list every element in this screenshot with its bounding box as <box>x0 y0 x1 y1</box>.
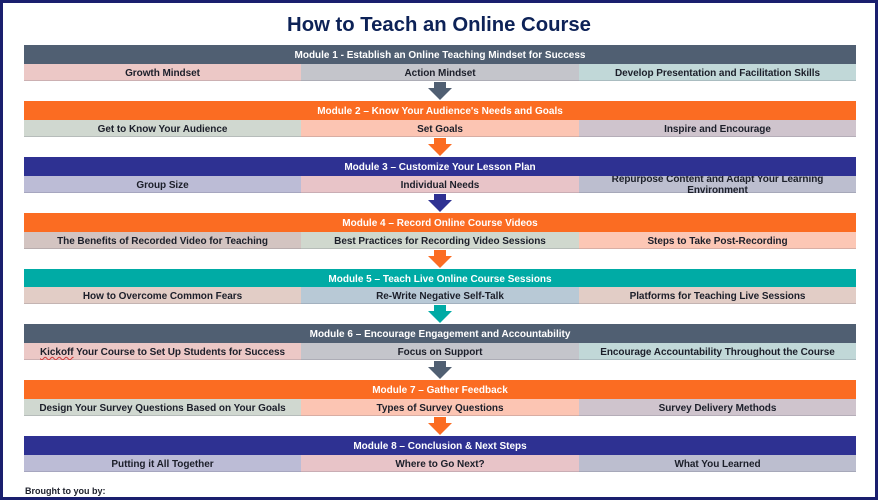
module 4 heading <box>24 213 856 232</box>
topic: negative self-talk: Re-Write Negative Self-Talk <box>376 291 504 302</box>
topic: survey delivery methods <box>579 399 856 416</box>
title: How to Teach an Online Course <box>287 14 591 36</box>
topic: presentation skills <box>579 64 856 81</box>
module 2 heading: Module 2 – Know Your Audience's Needs and Goals <box>317 106 563 117</box>
module 7 heading: Module 7 – Gather Feedback <box>372 385 508 396</box>
topic: set goals <box>301 120 579 137</box>
panel: module 7 <box>24 380 856 416</box>
topic: where to go next <box>301 455 579 472</box>
topic: overcome fears: How to Overcome Common Fears <box>83 291 242 302</box>
topic: action mindset <box>301 64 579 81</box>
topic: design survey questions: Design Your Survey Questions Based on Your Goals <box>39 403 286 414</box>
topic: survey delivery methods: Survey Delivery Methods <box>659 403 776 414</box>
module 1 heading <box>24 45 856 64</box>
topic: know your audience: Get to Know Your Audience <box>98 124 227 135</box>
panel: module 5 <box>24 269 856 304</box>
topic: set goals: Set Goals <box>417 124 463 135</box>
topic: post-recording steps: Steps to Take Post-Recording <box>647 236 788 247</box>
panel: module 4 <box>24 213 856 249</box>
topic: overcome fears <box>24 287 301 304</box>
module 6 heading: Module 6 – Encourage Engagement and Accountability <box>310 329 570 340</box>
module 5 heading: Module 5 – Teach Live Online Course Sessions <box>328 274 552 285</box>
topic: action mindset: Action Mindset <box>405 68 475 79</box>
topic: best practices <box>301 232 579 249</box>
topic: what you learned: What You Learned <box>674 459 761 470</box>
panel: module 8 <box>24 436 856 472</box>
arrow: module 4 to 5 <box>428 250 452 268</box>
module 3 heading <box>24 157 856 176</box>
arrow: module 6 to 7 <box>428 361 452 379</box>
topic: kickoff your course <box>24 343 301 360</box>
topic: focus on support: Focus on Support <box>398 347 482 358</box>
module 3 heading: Module 3 – Customize Your Lesson Plan <box>344 162 536 173</box>
topic: best practices: Best Practices for Recording Video Sessions <box>334 236 546 247</box>
topic: kickoff your course: Kickoff Your Course to Set Up Students for Success <box>40 347 285 358</box>
topic: individual needs <box>301 176 579 193</box>
topic: growth mindset <box>24 64 301 81</box>
topic: live platforms <box>579 287 856 304</box>
module 6 heading <box>24 324 856 343</box>
topic: post-recording steps <box>579 232 856 249</box>
topic: types of survey questions <box>301 399 579 416</box>
topic: individual needs: Individual Needs <box>401 180 479 191</box>
footer credit: Brought to you by: <box>25 486 106 496</box>
topic: know your audience <box>24 120 301 137</box>
topic: encourage accountability <box>579 343 856 360</box>
arrow: module 7 to 8 <box>428 417 452 435</box>
arrow: module 3 to 4 <box>428 194 452 212</box>
topic: group size <box>24 176 301 193</box>
topic: presentation skills: Develop Presentation and Facilitation Skills <box>615 68 820 79</box>
topic: types of survey questions: Types of Survey Questions <box>377 403 503 414</box>
topic: inspire and encourage: Inspire and Encourage <box>664 124 771 135</box>
module 7 heading <box>24 380 856 399</box>
topic: growth mindset: Growth Mindset <box>125 68 200 79</box>
topic: encourage accountability: Encourage Accountability Throughout the Course <box>600 347 835 358</box>
topic: where to go next: Where to Go Next? <box>395 459 485 470</box>
topic: putting it all together <box>24 455 301 472</box>
module 5 heading <box>24 269 856 287</box>
module 2 heading <box>24 101 856 120</box>
panel: module 1 <box>24 45 856 81</box>
arrow: module 5 to 6 <box>428 305 452 323</box>
panel: module 6 <box>24 324 856 360</box>
topic: design survey questions <box>24 399 301 416</box>
topic: benefits of recorded video <box>24 232 301 249</box>
topic: live platforms: Platforms for Teaching Live Sessions <box>630 291 805 302</box>
topic: inspire and encourage <box>579 120 856 137</box>
module 1 heading: Module 1 - Establish an Online Teaching Mindset for Success <box>294 50 585 61</box>
topic: negative self-talk <box>301 287 579 304</box>
topic: what you learned <box>579 455 856 472</box>
topic: putting it all together: Putting it All Together <box>111 459 214 470</box>
topic: group size: Group Size <box>136 180 189 191</box>
module 4 heading: Module 4 – Record Online Course Videos <box>342 218 538 229</box>
panel: module 3 <box>24 157 856 193</box>
topic: benefits of recorded video: The Benefits of Recorded Video for Teaching <box>57 236 268 247</box>
panel: module 2 <box>24 101 856 137</box>
arrow: module 2 to 3 <box>428 138 452 156</box>
topic: focus on support <box>301 343 579 360</box>
arrow: module 1 to 2 <box>428 82 452 100</box>
module 8 heading <box>24 436 856 455</box>
module 8 heading: Module 8 – Conclusion & Next Steps <box>353 441 527 452</box>
